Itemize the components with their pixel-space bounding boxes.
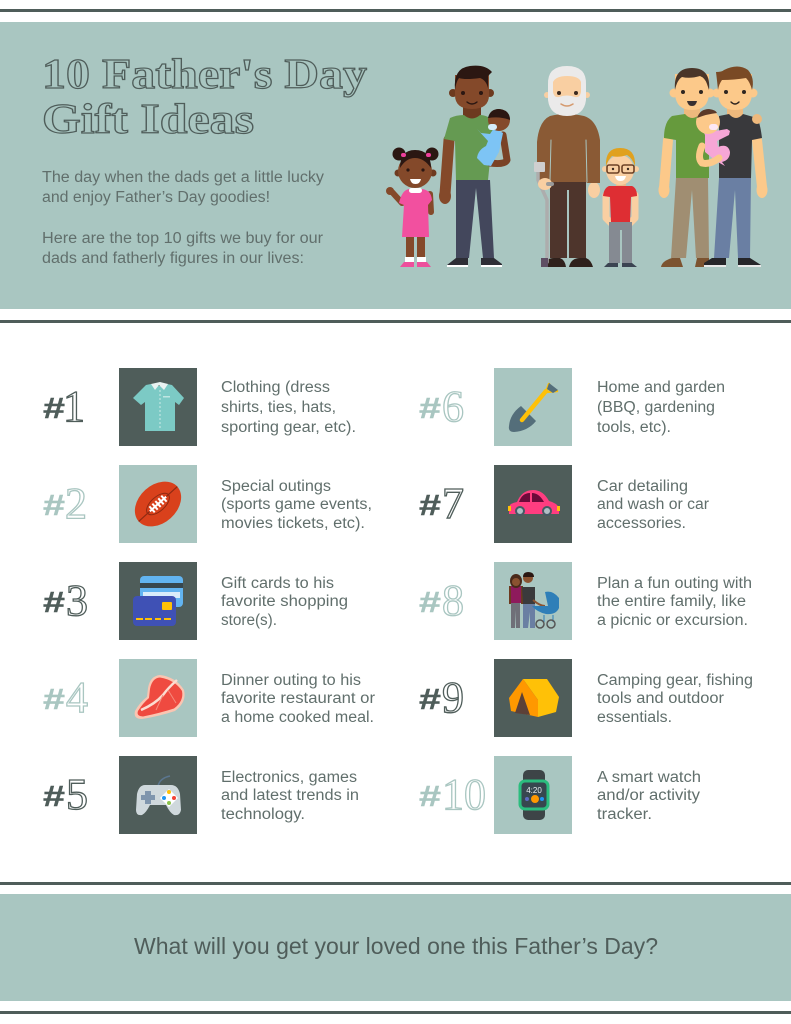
figure: man in black shirt with baby: [696, 66, 768, 267]
item 8: a picnic or excursion.: [597, 612, 748, 629]
item 6: (BBQ, gardening: [597, 399, 715, 416]
item 3: store(s).: [221, 612, 277, 629]
item 7: accessories.: [597, 515, 686, 532]
icon: game controller: [136, 776, 181, 815]
item 6: tools, etc).: [597, 419, 671, 436]
icon: steak: [135, 675, 185, 719]
figure: man in green shirt: [658, 68, 714, 267]
item 8: [419, 562, 752, 640]
item 9: [419, 659, 753, 737]
item 2: 2: [65, 479, 87, 528]
item 8: 8: [442, 576, 464, 625]
item 10: A smart watch: [597, 769, 701, 786]
title: Gift Ideas: [42, 97, 254, 143]
item 7: 7: [442, 479, 464, 528]
item 3: 3: [66, 576, 88, 625]
item 2: movies tickets, etc).: [221, 515, 365, 532]
title: 10 Father's Day: [42, 52, 367, 98]
item 5: 5: [66, 770, 88, 819]
item 5: and latest trends in: [221, 787, 359, 804]
item 10: [419, 756, 701, 834]
item 6: 6: [442, 382, 464, 431]
item 3: #: [43, 587, 65, 619]
item 8: #: [419, 587, 441, 619]
item 3: favorite shopping: [221, 593, 348, 610]
item 8: Plan a fun outing with: [597, 575, 752, 592]
item 5: #: [43, 781, 65, 813]
item 1: sporting gear, etc).: [221, 419, 356, 436]
text block: intro: and enjoy Father’s Day goodies!: [42, 189, 270, 206]
item 2: #: [43, 490, 65, 522]
item 7: [419, 465, 709, 543]
item 10: tracker.: [597, 806, 652, 823]
item 3: Gift cards to his: [221, 575, 334, 592]
panel: footer question: [0, 894, 791, 1001]
item 4: 4: [66, 673, 88, 722]
item 1: [43, 368, 356, 446]
item 9: tools and outdoor: [597, 690, 724, 707]
icon: shovel: [509, 383, 558, 432]
icon: smart watch: [520, 770, 548, 820]
title: [42, 52, 367, 143]
item 10: 10: [442, 770, 486, 819]
icon: car: [508, 490, 560, 515]
item 9: #: [419, 684, 441, 716]
item 6: #: [419, 393, 441, 425]
panel: footer question: What will you get your loved one this Father’s Day?: [134, 933, 658, 959]
icon: tent: [509, 679, 559, 717]
item 10: and/or activity: [597, 787, 700, 804]
item 6: [419, 368, 725, 446]
item 5: Electronics, games: [221, 769, 357, 786]
item 10: #: [419, 781, 441, 813]
figure: grandfather with cane: [534, 66, 600, 267]
icon: smart watch: 4:20: [526, 786, 542, 795]
figure: boy with glasses: [602, 148, 639, 267]
item 6: Home and garden: [597, 379, 725, 396]
item 1: Clothing (dress: [221, 379, 330, 396]
text block: intro: [42, 169, 324, 267]
item 2: [43, 465, 372, 543]
item 2: Special outings: [221, 478, 331, 495]
item 1: 1: [63, 382, 85, 431]
item 9: 9: [442, 673, 464, 722]
figure: girl waving: [386, 148, 438, 267]
icon: gift cards: [133, 576, 183, 626]
item 4: #: [43, 684, 65, 716]
illustration: family group: [386, 66, 768, 267]
item 9: Camping gear, fishing: [597, 672, 753, 689]
item 1: #: [43, 393, 65, 425]
item 4: favorite restaurant or: [221, 690, 375, 707]
item 1: shirts, ties, hats,: [221, 399, 336, 416]
item 8: the entire family, like: [597, 593, 746, 610]
item 7: Car detailing: [597, 478, 688, 495]
figure: dad with baby: [439, 66, 510, 267]
item 7: and wash or car: [597, 496, 709, 513]
icon: couple with stroller: [510, 572, 559, 628]
item 5: technology.: [221, 806, 305, 823]
text block: intro: dads and fatherly figures in our lives:: [42, 250, 304, 267]
item 5: [43, 756, 359, 834]
panel: header: [0, 22, 791, 309]
item 3: [43, 562, 348, 640]
item 2: (sports game events,: [221, 496, 372, 513]
icon: football: [126, 472, 190, 536]
panel: gift list: [43, 368, 753, 834]
text block: intro: Here are the top 10 gifts we buy for our: [42, 230, 323, 247]
text block: intro: The day when the dads get a little lucky: [42, 169, 324, 186]
item 4: a home cooked meal.: [221, 709, 374, 726]
icon: shirt: [133, 382, 184, 431]
item 9: essentials.: [597, 709, 672, 726]
item 7: #: [419, 490, 441, 522]
item 4: Dinner outing to his: [221, 672, 361, 689]
item 4: [43, 659, 375, 737]
